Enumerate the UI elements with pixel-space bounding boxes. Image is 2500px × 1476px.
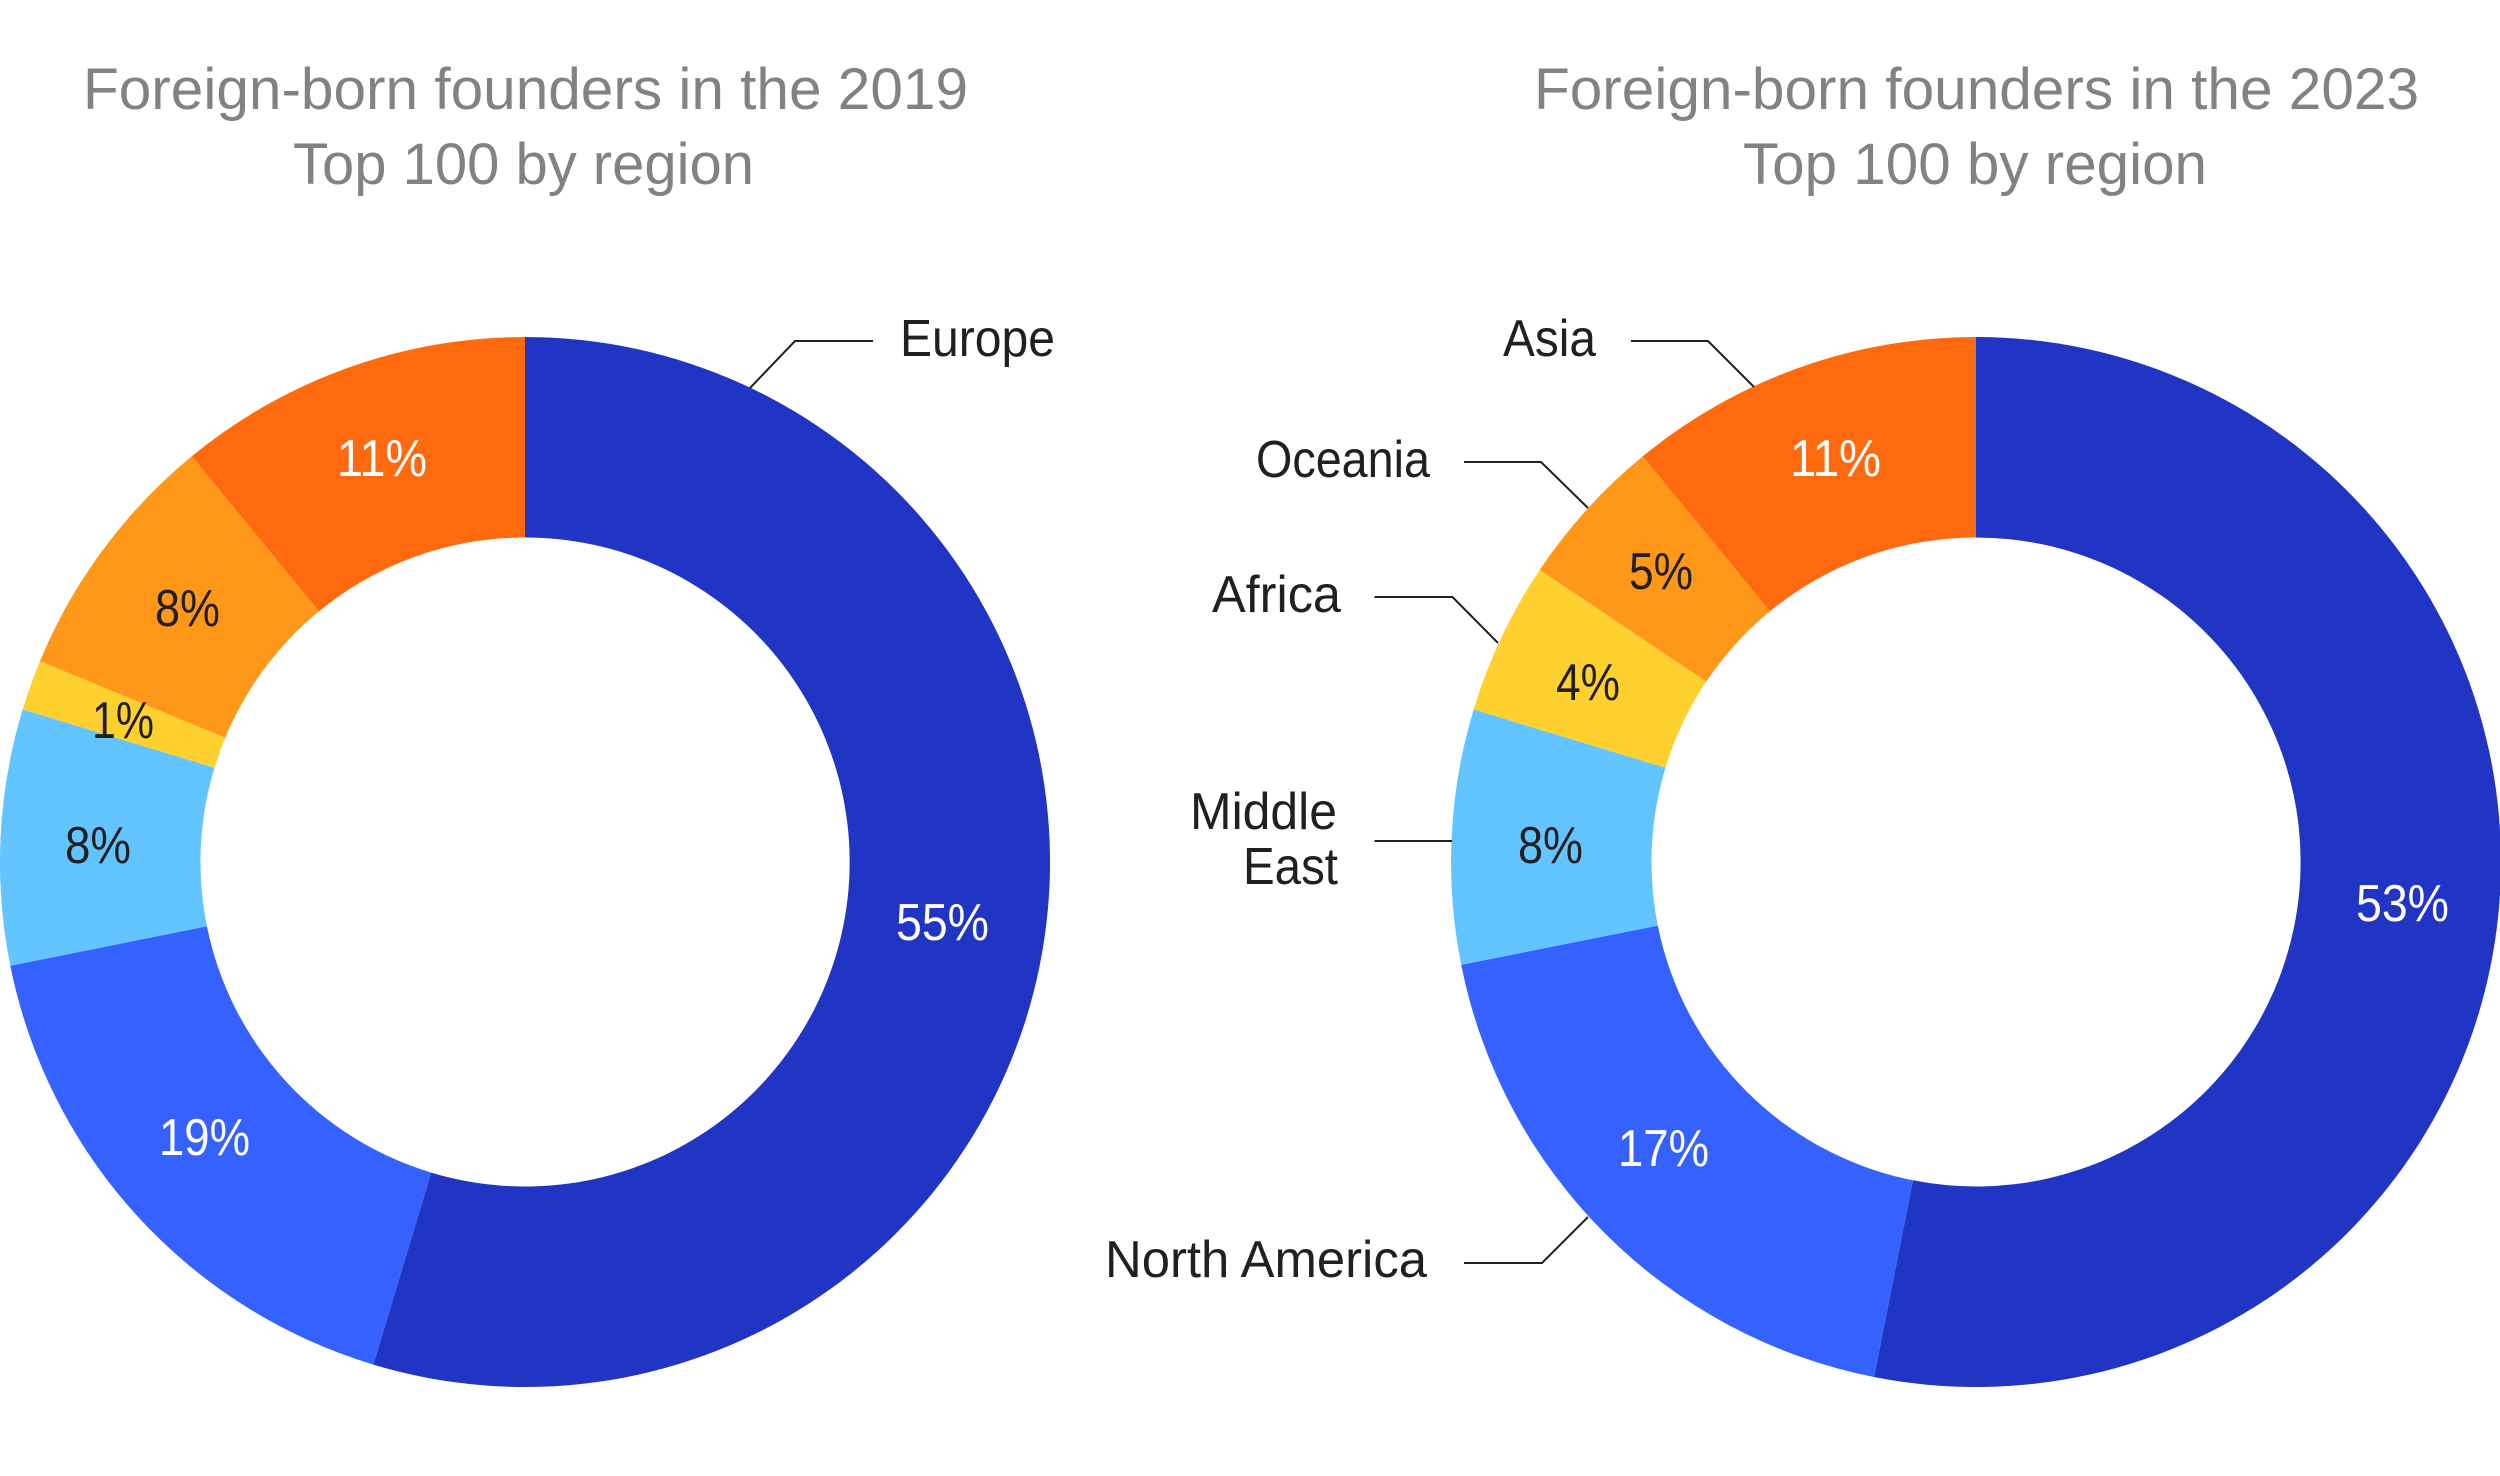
title: 2023 chart: Top 100 by region	[1743, 132, 2207, 197]
callout: Asia	[1503, 310, 1754, 387]
value: Middle East 8%: 8%	[1518, 817, 1583, 875]
value: Middle East 8%: 8%	[65, 817, 131, 875]
value: North America 17%: 17%	[1618, 1120, 1709, 1178]
donut chart: 2023	[1451, 337, 2500, 1387]
callout: Middle East: East	[1243, 838, 1338, 896]
slice: Middle East 8%	[1451, 709, 1666, 965]
slice: Africa 1%	[23, 661, 225, 768]
callout: Africa: Africa	[1212, 566, 1341, 624]
slice: North America 19%	[10, 926, 431, 1365]
title: 2019 chart: Foreign-born founders in the 2019	[83, 57, 968, 122]
callout: North America	[1105, 1217, 1588, 1289]
callout: Oceania	[1256, 431, 1588, 508]
value: Africa 4%: 4%	[1556, 654, 1620, 712]
value: Oceania 5%: 5%	[1629, 543, 1693, 601]
callout: Europe	[750, 310, 1055, 388]
slice: Middle East 8%	[0, 709, 215, 966]
value: Oceania 8%: 8%	[155, 580, 220, 638]
value: Africa 1%: 1%	[92, 692, 154, 750]
donut chart: 2019	[0, 337, 1050, 1387]
title: 2023 chart: Foreign-born founders in the 2023	[1534, 57, 2419, 122]
slice: Oceania 5%	[1540, 456, 1770, 682]
slice: Europe 55%	[373, 337, 1050, 1387]
title: 2019 chart	[83, 57, 968, 197]
slice: North America 17%	[1461, 926, 1913, 1377]
callout: Asia: Asia	[1503, 310, 1596, 368]
callout: Africa	[1212, 566, 1498, 643]
callout: Europe: Europe	[900, 310, 1055, 368]
value labels: 2019	[65, 430, 989, 1167]
title: 2019 chart: Top 100 by region	[293, 132, 754, 197]
slice: Oceania 8%	[40, 456, 319, 738]
slice: Europe 53%	[1874, 337, 2500, 1387]
callout: North America: North America	[1105, 1231, 1427, 1289]
slice: Asia 11%	[192, 337, 525, 611]
value: Asia 11%: 11%	[337, 430, 427, 488]
callout: Middle East	[1190, 783, 1452, 896]
value: Europe 53%: 53%	[2356, 875, 2449, 933]
callout: Middle East: Middle	[1190, 783, 1337, 841]
value: North America 19%: 19%	[159, 1109, 250, 1167]
title: 2023 chart	[1534, 57, 2419, 197]
callout: Oceania: Oceania	[1256, 431, 1430, 489]
slice: Asia 11%	[1643, 337, 1976, 611]
value: Europe 55%: 55%	[896, 894, 989, 952]
value labels: 2023	[1518, 430, 2449, 1178]
value: Asia 11%: 11%	[1790, 430, 1881, 488]
slice: Africa 4%	[1474, 570, 1706, 768]
